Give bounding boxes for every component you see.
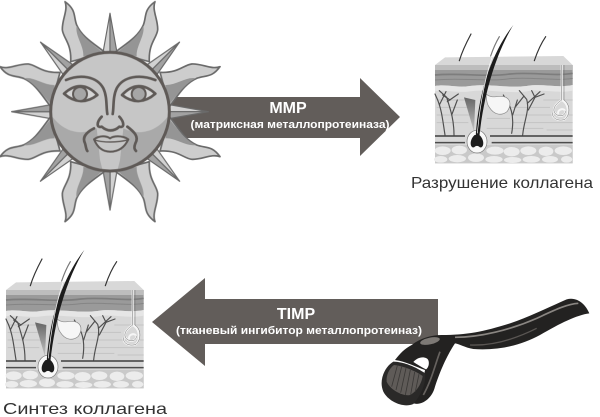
illustration: skin cross-section, collagen synthesis	[5, 250, 144, 388]
illustration: skin cross-section, collagen breakdown	[434, 25, 573, 163]
arrow: TIMP	[152, 278, 438, 366]
icon: sun with face	[0, 2, 220, 222]
arrow sublabel: matrix metalloproteinase: (матриксная металлопротеиназа)	[190, 119, 390, 131]
icon: dermaroller	[382, 299, 589, 405]
label: collagen breakdown: Разрушение коллагена	[411, 175, 593, 192]
arrow: MMP	[168, 78, 400, 156]
arrow label: MMP: MMP	[269, 100, 307, 117]
arrow sublabel: tissue inhibitor of metalloproteinases: (тканевый ингибитор металлопротеиназ)	[176, 325, 422, 337]
arrow label: TIMP: TIMP	[277, 306, 315, 323]
